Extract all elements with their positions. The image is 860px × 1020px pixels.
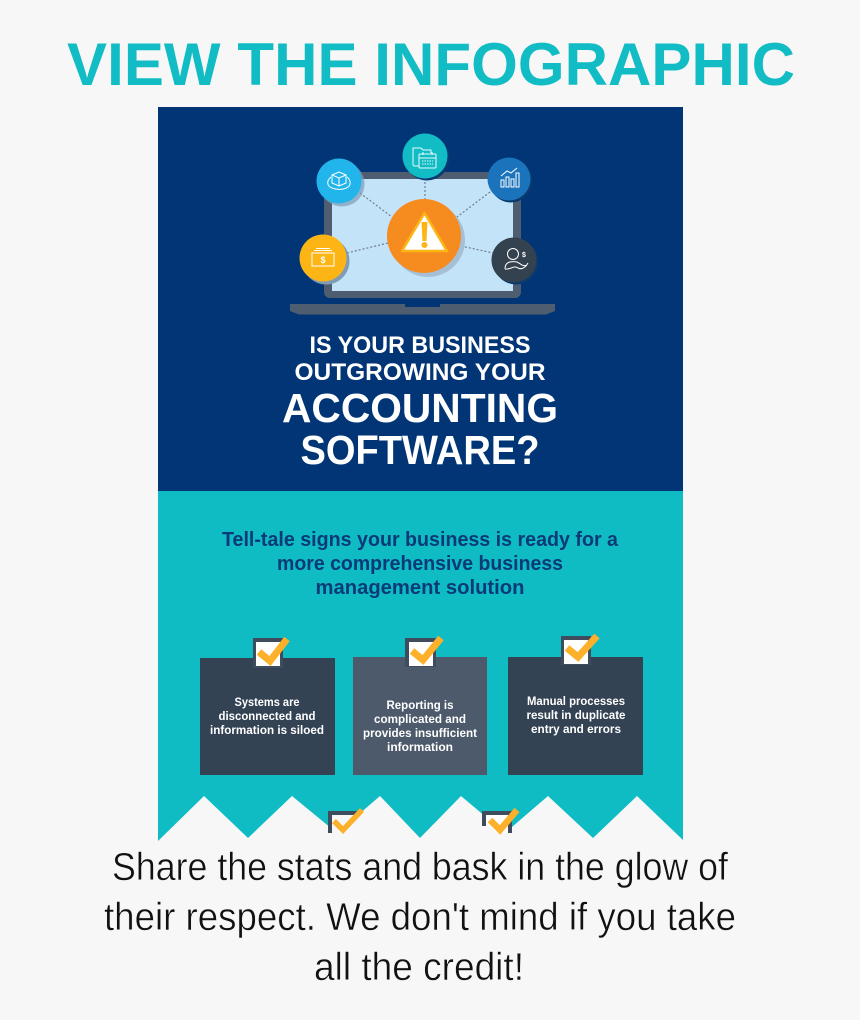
- dotted connectors: [347, 178, 493, 253]
- card text: disconnected and: [218, 711, 316, 723]
- card: complicated reporting: [353, 638, 487, 775]
- caption: their respect. We don't mind if you take: [104, 896, 736, 939]
- icon: box: [316, 158, 364, 206]
- card text: entry and errors: [531, 724, 621, 736]
- card: manual processes: [508, 636, 643, 775]
- card text: provides insufficient: [363, 728, 477, 740]
- icon: checkbox: [405, 638, 441, 667]
- headline: IS YOUR BUSINESS: [310, 332, 530, 359]
- card text: complicated and: [374, 714, 466, 726]
- icon: calendar folder: [402, 134, 450, 180]
- panel: teal body with zigzag edge: [158, 491, 683, 841]
- card text: information is siloed: [210, 725, 324, 737]
- card: disconnected systems: [200, 638, 335, 775]
- icon: checkbox: [561, 636, 597, 665]
- icon: cropped checkbox left: [328, 810, 362, 833]
- card text: Systems are: [234, 697, 300, 709]
- icon: checkbox: [253, 638, 287, 668]
- icon: person with revenue: $: [522, 252, 526, 259]
- caption: all the credit!: [314, 946, 524, 989]
- illustration: laptop with connected icons: [290, 134, 555, 314]
- headline: SOFTWARE?: [300, 427, 540, 473]
- headline: ACCOUNTING: [282, 385, 558, 431]
- card text: result in duplicate: [526, 710, 626, 722]
- card text: information: [387, 742, 453, 754]
- panel: navy header: [158, 107, 683, 492]
- title: VIEW THE INFOGRAPHIC: [67, 31, 795, 98]
- caption: [104, 846, 736, 989]
- icon: budget cash: [300, 234, 350, 284]
- subheading: [222, 529, 619, 599]
- card text: [363, 700, 477, 754]
- card text: [526, 696, 626, 736]
- card text: Reporting is: [386, 700, 454, 712]
- icon: growth chart: [488, 158, 532, 202]
- caption: Share the stats and bask in the glow of: [112, 846, 728, 889]
- subheading: more comprehensive business: [277, 553, 563, 575]
- icon: warning circle: [387, 199, 465, 277]
- icon: person with revenue: [492, 238, 538, 284]
- card text: [210, 697, 324, 737]
- icon: budget cash: $: [320, 255, 326, 265]
- icon: cropped checkbox right: [482, 810, 517, 833]
- subheading: management solution: [316, 577, 524, 599]
- headline: [282, 332, 558, 473]
- subheading: Tell-tale signs your business is ready for a: [222, 529, 619, 551]
- headline: OUTGROWING YOUR: [294, 359, 546, 386]
- laptop base: [290, 304, 555, 314]
- card text: Manual processes: [527, 696, 625, 708]
- laptop screen: [324, 172, 521, 298]
